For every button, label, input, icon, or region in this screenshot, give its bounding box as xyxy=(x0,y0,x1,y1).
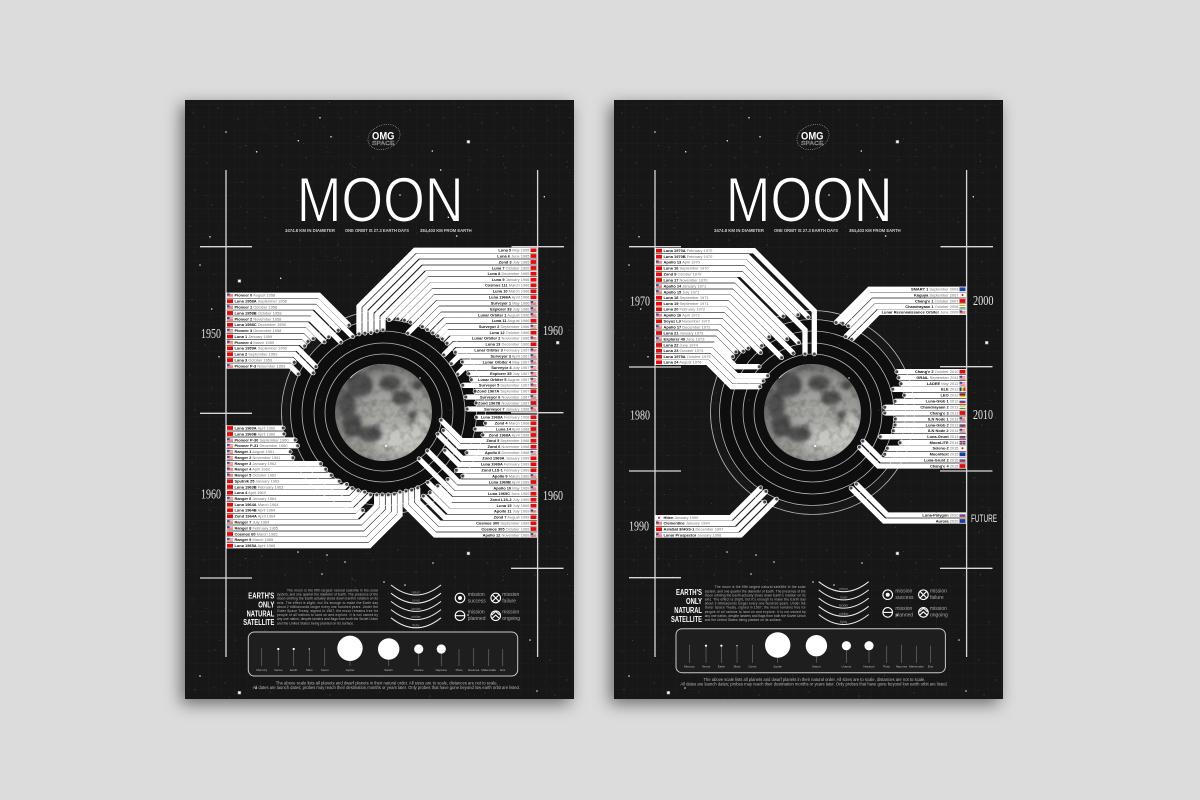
heading: Earth's only natural satellite xyxy=(243,590,274,627)
heading: Earth's only natural satellite: NATURAL xyxy=(674,605,702,615)
mission list: future: Aurora 2020 xyxy=(936,518,959,523)
mission list: 1965-1968: Luna 8 December 1965 xyxy=(488,271,530,276)
legend: mission success: mission xyxy=(895,589,913,595)
mission list: 1965-1968: Luna 1966A April 1966 xyxy=(489,295,530,300)
mission list: 1990s: Hiten January 1990 xyxy=(664,515,699,520)
mission list: 1965-1968: Luna 11 August 1966 xyxy=(492,318,530,323)
moon facts xyxy=(285,228,472,233)
mission list: 1970-1976: Apollo 13 April 1970 xyxy=(664,260,701,265)
planet scale panel: Uranus xyxy=(414,668,424,672)
orbit type legend arcs: lander xyxy=(839,604,849,608)
mission list: 1960-1965: Cosmos 60 March 1965 xyxy=(234,531,278,536)
mission list: 1990s: AsiaSat 3/HGS-1 December 1997 xyxy=(664,527,723,532)
footer block xyxy=(671,582,948,687)
mission list: 1970-1976: Luna 22 June 1974 xyxy=(664,342,699,347)
legend: mission planned xyxy=(883,606,913,619)
legend: mission planned: mission xyxy=(468,610,485,616)
mission list: 1990s xyxy=(655,488,777,537)
mission list: 1968-1969: Zond L1S-2 July 1969 xyxy=(490,497,530,502)
description paragraph: moon orbiting the Earth actually slows down Earth's rotation on its xyxy=(277,597,378,601)
planet scale panel: Jupiter xyxy=(773,665,782,669)
description paragraph: and the United States being planted on its surface. xyxy=(705,618,782,622)
mission list: 1965-1968: Surveyor 3 April 1967 xyxy=(491,353,530,358)
mission list: 2010s: Chang'e 2 October 2010 xyxy=(915,369,959,374)
mission list: 1968-1969: Luna 15 July 1969 xyxy=(497,503,530,508)
mission list: 1968-1969: Apollo 10 May 1969 xyxy=(493,485,530,490)
mission list: 1970-1976: Apollo 17 December 1972 xyxy=(664,324,710,329)
year labels: 1980 xyxy=(630,408,650,423)
poster sheet xyxy=(614,100,1003,699)
mission list: 1965-1968: Surveyor 4 July 1967 xyxy=(491,365,530,370)
mission list: 1965-1968: Surveyor 1 May 1966 xyxy=(491,300,530,305)
mission list: 1958-1959: Luna 1 January 1959 xyxy=(234,334,272,339)
planet scale panel xyxy=(676,629,945,673)
mission list: future: Luna-Polygon 2020 xyxy=(922,512,959,517)
year labels: 2000 xyxy=(973,294,994,309)
planet scale panel: Mercury xyxy=(256,668,268,672)
description paragraph: any one nation, despite landers and flags from both the Soviet Union xyxy=(705,614,806,618)
mission list: 2010s xyxy=(859,369,966,468)
legend: mission failure: failure xyxy=(502,598,516,604)
planet scale panel: Pluto xyxy=(456,668,463,672)
mission list: 1960-1965: Ranger 2 November 1961 xyxy=(234,455,280,460)
mission list: 1990s: Clementine January 1994 xyxy=(664,521,710,526)
mission list: 2010s: LEO 2012 xyxy=(941,393,958,398)
legend: mission failure xyxy=(491,592,519,604)
planet scale panel: Saturn xyxy=(812,665,821,669)
mission list: 1968-1969: Apollo 9 March 1969 xyxy=(492,473,530,478)
orbit type legend arcs: flyby xyxy=(840,620,847,624)
mission list: 1958-1959: Luna 1958B October 1958 xyxy=(234,310,282,315)
mission list: 1958-1959: Pioneer 0 August 1958 xyxy=(234,293,276,298)
description paragraph: system, and one quarter the diameter of Earth. The presence of the xyxy=(277,593,378,597)
mission list: 2010s: ILN Node 1 2013 xyxy=(928,416,959,421)
description paragraph xyxy=(277,588,379,625)
description paragraph: about 2 milliseconds longer every one hundred years. Under the xyxy=(277,605,378,609)
description paragraph: people of all nations to land on and explore. It is not owned by xyxy=(277,613,378,617)
mission list: 2010s: LADEE May 2012 xyxy=(927,381,958,386)
mission list: 1965-1968: Luna 12 October 1966 xyxy=(490,330,530,335)
footnote xyxy=(253,680,520,690)
timeline frame lines xyxy=(629,170,993,657)
description paragraph: any one nation, despite landers and flags from both the Soviet Union xyxy=(277,617,378,621)
legend: mission ongoing xyxy=(491,610,520,622)
mission list: 1960-1965: Luna 1960B April 1960 xyxy=(234,431,276,436)
mission list: 1965-1968: Surveyor 7 January 1968 xyxy=(484,406,530,411)
rings around the moon xyxy=(710,310,914,514)
planet scale panel: Jupiter xyxy=(345,668,355,672)
mission list: 1960-1965: Ranger 6 January 1964 xyxy=(234,496,277,501)
mission list: 2010s: Luna-Grunt 2014 xyxy=(927,434,959,439)
legend: mission ongoing: mission xyxy=(502,610,519,616)
mission list: 2000s: SMART 1 September 2003 xyxy=(911,287,959,292)
planet scale panel: Mars xyxy=(734,665,741,669)
mission list: 2000s: Chang'e 1 October 2007 xyxy=(915,298,958,303)
mission list: 1960-1965: Luna 4 April 1963 xyxy=(234,490,267,495)
description paragraph: The moon is the fifth largest natural satellite in the solar xyxy=(287,588,379,592)
mission list: 2010s: Chandrayaan 2 2013 xyxy=(920,405,959,410)
header: logo: SPACE xyxy=(801,141,824,147)
mission list: 1958-1959: Pioneer P-3 November 1959 xyxy=(234,363,285,368)
year labels: FUTURE xyxy=(971,513,997,525)
mission list: 1968-1969: Zond 5 September 1968 xyxy=(486,438,530,443)
mission list: 1968-1969: Zond 6 November 1968 xyxy=(487,444,530,449)
legend: mission success: mission xyxy=(468,592,485,598)
legend: mission success xyxy=(455,592,486,604)
orbit type legend arcs: flyby xyxy=(413,623,420,627)
description paragraph: The moon is the fifth largest natural satellite in the solar xyxy=(715,585,807,589)
orbit type legend arcs xyxy=(391,585,441,628)
mission list: 1965-1968: Zond 1967A September 1967 xyxy=(477,389,530,394)
moon facts: 384,403 KM FROM EARTH xyxy=(849,228,901,233)
mission list: 1970-1976: Apollo 15 July 1971 xyxy=(664,289,699,294)
mission list: 1960-1965: Ranger 5 October 1962 xyxy=(234,473,276,478)
planet scale panel: Saturn xyxy=(384,668,393,672)
mission list: 1958-1959: Pioneer 1 October 1958 xyxy=(234,304,278,310)
planet scale panel: Uranus xyxy=(842,665,852,669)
planet scale panel: Makemake xyxy=(909,665,924,669)
mission list: 1968-1969: Luna 1969B April 1969 xyxy=(489,479,530,484)
mission list: 1965-1968: Surveyor 6 November 1967 xyxy=(480,394,530,399)
mission list: 1965-1968: Lunar Orbiter 3 February 1967 xyxy=(474,348,530,353)
description paragraph: system, and one quarter the diameter of Earth. The presence of the xyxy=(705,589,806,593)
mission list: 1968-1969 xyxy=(406,415,537,537)
mission list: 1965-1968: Lunar Orbiter 4 May 1967 xyxy=(483,359,530,364)
footnote: The above scale lists all planets and dwarf planets in their natural order. All sizes are to scale, distances are not to scale. xyxy=(703,677,925,682)
planet scale panel: Mercury xyxy=(684,665,695,669)
mission list: 1960-1965: Ranger 3 January 1962 xyxy=(234,461,276,466)
mission list: 1965-1968: Zond 3 July 1965 xyxy=(499,259,530,264)
mission list: 2000s: Chandrayaan 1 October 2008 xyxy=(905,304,959,309)
mission list: 1965-1968: Lunar Orbiter 5 August 1967 xyxy=(478,377,530,382)
mission list: 2010s: Luna-Glob 2 2013 xyxy=(926,422,959,427)
header: logo: OMG xyxy=(372,130,394,142)
mission list: 1958-1959 xyxy=(226,293,353,374)
orbit type legend arcs: orbiter xyxy=(411,615,422,619)
mission list: 1965-1968: Explorer 35 July 1967 xyxy=(490,371,530,376)
mission list: 1970-1976 xyxy=(655,248,814,387)
mission list: 1970-1976: Luna 1975A October 1975 xyxy=(664,354,711,359)
mission list: 1965-1968: Luna 9 January 1966 xyxy=(492,277,530,282)
panel: poster 1970s-future xyxy=(614,100,1003,699)
mission list: 1965-1968: Luna 10 March 1966 xyxy=(493,289,530,294)
mission list: 2000s xyxy=(836,287,966,339)
moon photo xyxy=(335,363,432,461)
mission list: 1960-1965: Ranger 7 July 1964 xyxy=(234,519,270,524)
mission list: 1958-1959: Pioneer 2 November 1958 xyxy=(234,316,282,321)
footnote: All dates are launch dates; probes may reach their destination months or years later. Only probes that have gone beyond low earth orbit are listed. xyxy=(680,682,948,687)
mission list: 2000s: Kaguya September 2007 xyxy=(914,292,958,297)
mission list: 1970-1976: Luna 20 February 1972 xyxy=(664,307,705,312)
mission list: 1960-1965: Ranger 8 February 1965 xyxy=(234,525,279,530)
legend: mission failure xyxy=(919,589,947,601)
mission list: 1970-1976: Luna 1970B February 1970 xyxy=(664,254,713,259)
mission list: 1970-1976: Luna 24 August 1976 xyxy=(664,360,702,365)
mission list: 1960-1965: Ranger 9 March 1965 xyxy=(234,537,274,542)
heading: Earth's only natural satellite: ONLY xyxy=(686,596,702,606)
mission list: 1968-1969: Cosmos 300 September 1969 xyxy=(476,521,530,526)
planet scale panel: Mars xyxy=(306,668,313,672)
planet scale panel: Ceres xyxy=(748,665,757,669)
mission list: 2010s: GRAIL September 2011 xyxy=(916,375,958,380)
description paragraph: and the United States being planted on its surface. xyxy=(277,621,354,625)
mission list: 1958-1959: Pioneer 4 March 1959 xyxy=(234,340,274,345)
header: logo: SPACE xyxy=(372,141,395,147)
mission list: 1968-1969: Apollo 11 July 1969 xyxy=(494,509,530,514)
planet scale panel: Eris xyxy=(500,668,506,672)
footer block xyxy=(243,585,520,690)
legend: mission planned: planned xyxy=(895,613,913,619)
legend: mission ongoing: mission xyxy=(930,606,947,612)
title: MOON xyxy=(726,166,893,236)
mission list: 1965-1968: Luna 5 May 1965 xyxy=(498,248,530,253)
mission list: 1968-1969: Luna 14 April 1968 xyxy=(496,426,530,431)
moon facts: 3474.8 KM IN DIAMETER xyxy=(714,228,765,233)
mission list: 1968-1969: Zond 7 August 1969 xyxy=(494,515,530,520)
orbit type legend arcs: return xyxy=(839,587,848,591)
poster sheet xyxy=(185,100,574,699)
mission list: 1968-1969: Zond 1969A January 1969 xyxy=(482,456,530,461)
mission list: 1965-1968: Zond 1967B November 1967 xyxy=(478,400,530,405)
header: logo xyxy=(364,120,404,154)
mission list: 1968-1969: Luna 1969C June 1969 xyxy=(488,491,530,496)
planet scale panel: Haumea xyxy=(896,665,907,669)
legend: mission planned xyxy=(455,610,486,622)
bright square stars xyxy=(667,140,988,694)
heading: Earth's only natural satellite xyxy=(671,587,702,624)
moon facts: ONE ORBIT IS 27.3 EARTH DAYS xyxy=(774,228,838,233)
starfield xyxy=(619,104,998,696)
heading: Earth's only natural satellite: SATELLITE xyxy=(243,617,274,627)
mission list: 1968-1969: Apollo 8 December 1968 xyxy=(485,450,530,455)
legend: mission failure: mission xyxy=(502,592,519,598)
mission list: 2010s: ILN Node 2 2014 xyxy=(928,428,959,433)
mission list: 1965-1968: Cosmos 111 March 1966 xyxy=(485,283,530,288)
planet scale panel: Earth xyxy=(718,665,725,669)
legend: mission failure: mission xyxy=(930,589,947,595)
moon facts: 384,403 KM FROM EARTH xyxy=(420,228,472,233)
mission list: 1970-1976: Luna 17 November 1970 xyxy=(664,277,708,282)
mission list: 1960-1965: Luna 1964B April 1964 xyxy=(234,508,276,513)
bright square stars xyxy=(238,140,559,694)
mission list: 1970-1976: Explorer 49 June 1973 xyxy=(664,336,705,341)
infographic: two Moon mission posters xyxy=(170,94,1010,715)
mission list: 1968-1969: Zond 1968A April 1968 xyxy=(489,432,530,437)
legend: mission planned: mission xyxy=(895,606,913,612)
orbit type legend arcs: orbiter xyxy=(839,612,849,616)
moon facts: ONE ORBIT IS 27.3 EARTH DAYS xyxy=(345,228,409,233)
year labels: 1960 xyxy=(543,489,563,504)
mission list: 1970-1976: Apollo 16 April 1972 xyxy=(664,313,700,318)
year labels: 1970 xyxy=(630,295,650,310)
title: MOON xyxy=(297,166,464,236)
planet scale panel: Venus xyxy=(702,665,711,669)
description paragraph: axis. The effect is slight, but it's enough to make the Earth day xyxy=(705,597,806,601)
mission list: 1965-1968: Surveyor 5 September 1967 xyxy=(479,383,530,388)
mission list: 1965-1968: Luna 13 December 1966 xyxy=(485,342,530,347)
mission list: 1970-1976: Luna 1970A February 1970 xyxy=(664,248,713,253)
mission list: 1970-1976: Luna 19 September 1971 xyxy=(664,301,709,306)
mission list: 1970-1976: Luna 18 September 1971 xyxy=(664,295,709,300)
mission list: 1960-1965: Luna 1965A April 1965 xyxy=(234,543,276,548)
mission list: 1958-1959: Luna 1958A September 1958 xyxy=(234,299,288,304)
legend: mission failure: failure xyxy=(930,595,944,601)
planet scale panel: Earth xyxy=(290,668,298,672)
orbit type legend arcs: rover xyxy=(412,599,421,603)
orbit type legend arcs: return xyxy=(412,590,421,594)
mission list: 2010s: Chang'e 4 2015 xyxy=(930,463,959,468)
mission list: 2010s: Luna-Glob 1 2012 xyxy=(926,399,958,404)
description paragraph: Outer Space Treaty, signed in 1967, the moon remains free for xyxy=(705,606,807,610)
mission list: 1968-1969: Apollo 12 November 1969 xyxy=(483,532,530,537)
description paragraph: Outer Space Treaty, signed in 1967, the moon remains free for xyxy=(277,609,379,613)
mission list: 1960-1965: Sputnik 25 January 1963 xyxy=(234,479,280,484)
header: logo: OMG xyxy=(801,130,824,142)
heading: Earth's only natural satellite: ONLY xyxy=(258,600,274,610)
mission list: 1958-1959: Luna 3 October 1959 xyxy=(234,358,272,362)
heading: Earth's only natural satellite: EARTH'S xyxy=(676,587,702,597)
heading: Earth's only natural satellite: SATELLITE xyxy=(671,614,702,624)
planet scale panel: Haumea xyxy=(468,668,480,672)
planet scale panel: Makemake xyxy=(481,668,496,672)
mission list: 1958-1959: Luna 1959A September 1959 xyxy=(234,346,287,351)
orbit type legend arcs: rover xyxy=(840,595,848,599)
mission list: future xyxy=(851,484,966,523)
mission list: 2010s: MoonNext 2015 xyxy=(930,452,959,457)
mission list: 1968-1969: Cosmos 305 October 1969 xyxy=(481,526,530,531)
description paragraph: moon orbiting the Earth actually slows down Earth's rotation on its xyxy=(705,593,806,597)
mission list: 1960-1965: Ranger 4 April 1962 xyxy=(234,467,270,472)
mission list: 1965-1968: Surveyor 2 September 1966 xyxy=(479,324,530,329)
timeline frame lines xyxy=(200,170,564,657)
mission list: 1965-1968: Lunar Orbiter 1 August 1966 xyxy=(478,312,530,317)
footnote xyxy=(680,677,948,687)
mission list: 1958-1959: Luna 2 September 1959 xyxy=(234,352,277,357)
mission list: 1965-1968: Explorer 33 July 1966 xyxy=(490,306,530,311)
year labels: 2010 xyxy=(973,408,993,423)
legend: mission ongoing xyxy=(919,606,948,619)
description paragraph xyxy=(705,585,807,622)
mission list: 1970-1976: Zond 8 October 1970 xyxy=(664,272,702,277)
moon photo xyxy=(764,363,861,461)
mission list: 2010s: MoonLITE 2014 xyxy=(930,440,959,445)
legend: mission success: success xyxy=(468,598,486,604)
rings around the moon xyxy=(282,310,486,514)
panel: poster 1950s-1960s xyxy=(185,100,574,699)
year labels: 1960 xyxy=(201,488,221,503)
mission list: 1960-1965: Luna 1964A March 1964 xyxy=(234,502,279,507)
mission list: 1970-1976: Apollo 14 January 1971 xyxy=(664,283,706,288)
mission list: 1960-1965: Pioneer P-30 September 1960 xyxy=(234,437,289,442)
mission list: 1970-1976: Luna 23 October 1974 xyxy=(664,348,704,353)
year labels xyxy=(629,294,997,535)
planet scale panel: Pluto xyxy=(883,665,890,669)
orbit type legend arcs: lander xyxy=(411,607,422,611)
planet scale panel: Eris xyxy=(928,665,933,669)
legend: mission planned: planned xyxy=(468,616,486,622)
mission list: 2010s: Chang'e 3 2013 xyxy=(930,410,959,415)
planet scale panel: Ceres xyxy=(321,668,329,672)
heading: Earth's only natural satellite: NATURAL xyxy=(247,608,274,618)
moon facts: 3474.8 KM IN DIAMETER xyxy=(285,228,336,233)
description paragraph: people of all nations to land on and explore. It is not owned by xyxy=(705,610,806,614)
mission list: 1965-1968: Luna 6 June 1965 xyxy=(497,253,530,258)
mission list: 1960-1965: Zond 1964A April 1964 xyxy=(234,514,276,519)
footnote: All dates are launch dates; probes may reach their destination months or years later. Only probes that have gone beyond low earth orbit are listed. xyxy=(253,685,520,690)
planet scale panel: Venus xyxy=(274,668,283,672)
mission list: 2010s: Luna-Grunt 2 2015 xyxy=(924,457,959,462)
mission list: 1968-1969: Luna 1968A February 1968 xyxy=(481,415,530,420)
mission list: 1960-1965: Luna 1960A April 1960 xyxy=(234,425,276,430)
mission list: 1970-1976: Luna 21 January 1973 xyxy=(664,330,704,335)
mission list: 1960-1965: Pioneer P-31 December 1960 xyxy=(234,443,288,448)
mission list: 1970-1976: Luna 16 September 1970 xyxy=(664,266,709,271)
mission list: 1965-1968: Lunar Orbiter 2 November 1966 xyxy=(472,336,530,341)
mission list: 2010s: ELE 2012 xyxy=(941,387,958,392)
planet scale panel: Neptune xyxy=(863,665,875,669)
orbit type legend arcs xyxy=(819,582,869,624)
mission list: 1958-1959: Pioneer 3 December 1958 xyxy=(234,328,282,333)
legend: mission success: success xyxy=(895,595,914,601)
mission list: 1960-1965 xyxy=(226,425,400,548)
mission list: 1958-1959: Luna 1958C December 1958 xyxy=(234,322,287,327)
mission list: 2000s: Lunar Reconnaissance Orbiter June 2009 xyxy=(882,310,958,315)
mission list: 1968-1969: Zond 4 March 1968 xyxy=(495,421,530,426)
starfield xyxy=(190,104,569,696)
mission list: 1968-1969: Zond L1S-1 February 1969 xyxy=(481,468,530,473)
mission list: 1968-1969: Luna 1969A February 1969 xyxy=(481,462,530,467)
mission list: 1965-1968 xyxy=(359,248,537,411)
mission list: 2010s: Selene-2 2015 xyxy=(932,446,959,451)
mission list: 1960-1965: Ranger 1 August 1961 xyxy=(234,449,274,454)
description paragraph: about 2 milliseconds longer every one hundred years. Under the xyxy=(705,602,806,606)
year labels: 1990 xyxy=(629,520,649,535)
footnote: The above scale lists all planets and dwarf planets in their natural order. All sizes are to scale, distances are not to scale. xyxy=(276,680,498,685)
planet scale panel xyxy=(248,632,518,676)
mission list: 1990s: Lunar Prospector January 1998 xyxy=(664,532,722,537)
moon facts xyxy=(714,228,901,233)
header: logo xyxy=(793,120,833,154)
description paragraph: axis. The effect is slight, but it's enough to make the Earth day xyxy=(277,601,378,605)
mission list: 1960-1965: Luna 1963B February 1963 xyxy=(234,484,284,489)
year labels: 1960 xyxy=(543,324,563,339)
year labels: 1950 xyxy=(201,327,221,342)
legend: mission ongoing: ongoing xyxy=(930,613,948,619)
year labels xyxy=(201,324,563,504)
mission list: 1970-1976: Soyuz L3 November 1972 xyxy=(664,319,710,324)
mission list: 1965-1968: Luna 7 October 1965 xyxy=(492,265,530,270)
legend: mission success xyxy=(883,589,914,601)
planet scale panel: Neptune xyxy=(436,668,447,672)
heading: Earth's only natural satellite: EARTH'S xyxy=(248,590,274,600)
legend: mission ongoing: ongoing xyxy=(502,616,520,622)
